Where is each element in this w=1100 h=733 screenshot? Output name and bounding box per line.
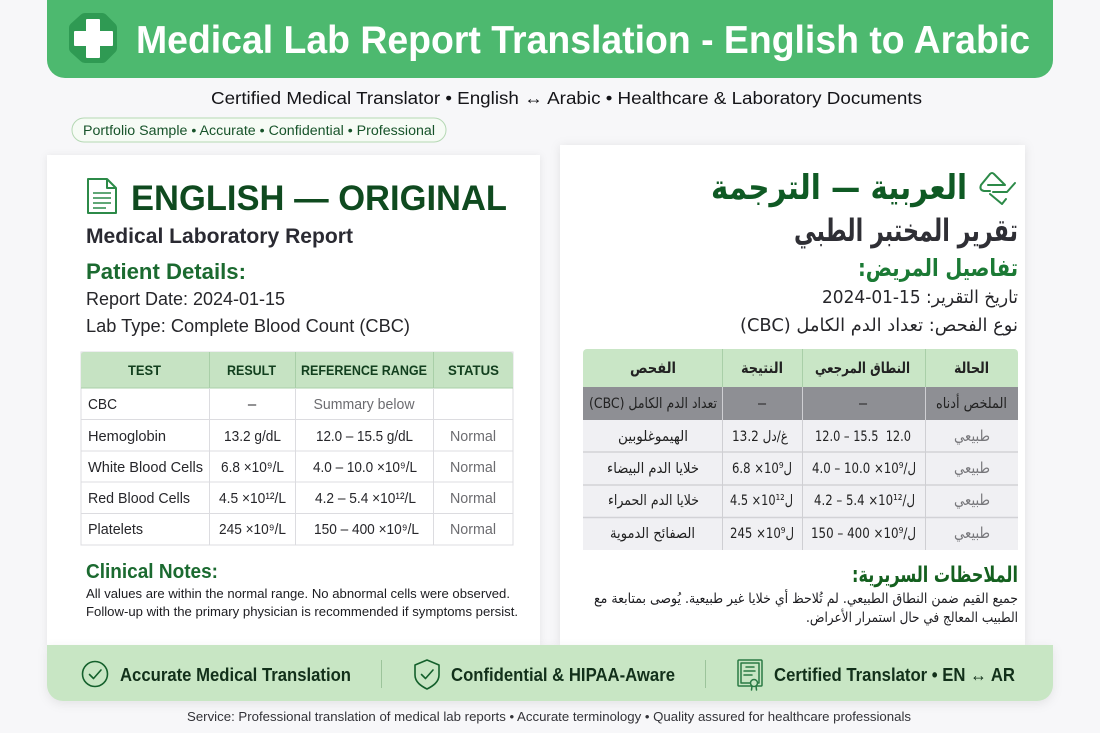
Arabic row: platelets: الصفائح الدموية: [610, 526, 695, 542]
row: white blood cells: 6.8 ×10⁹/L: [221, 459, 284, 476]
row: hemoglobin: 12.0 – 15.5 g/dL: [316, 428, 413, 445]
table header: TEST: [128, 362, 161, 378]
table: English results: [81, 352, 513, 545]
heading: Arabic clinical notes: الملاحظات السريرية:: [852, 563, 1018, 588]
Arabic row: red blood cells: [608, 491, 990, 510]
icon: shield: [415, 660, 439, 689]
Arabic row: white blood cells: 4.0 – 10.0 ×10⁹/ل: [812, 461, 916, 477]
Arabic patient detail lines: تاريخ التقرير: ⁦2024-01-15⁩: [822, 287, 1018, 308]
table header: REFERENCE RANGE: [301, 362, 427, 378]
feature: confidential: Confidential & HIPAA-Aware: [451, 665, 675, 685]
heading: patient details: Patient Details:: [86, 259, 246, 284]
row: red blood cells: [88, 490, 496, 507]
row: platelets: [88, 521, 496, 538]
Arabic row: red blood cells: 4.2 – 5.4 ×10¹²/ل: [814, 493, 915, 509]
Arabic report title: تقرير المختبر الطبي: [794, 213, 1018, 249]
row: red blood cells: 4.5 ×10¹²/L: [219, 490, 286, 507]
Arabic row: white blood cells: خلايا الدم البيضاء: [607, 461, 699, 477]
heading: Arabic patient details: تفاصيل المريض:: [858, 254, 1018, 282]
bottom feature band: [47, 645, 1053, 701]
row: hemoglobin: Hemoglobin: [88, 428, 166, 445]
icon: translation swoosh: [980, 173, 1015, 204]
row: CBC: –: [248, 396, 257, 413]
Arabic row: platelets: 245 ×10⁹ل: [730, 526, 794, 542]
table: Arabic results: [583, 349, 1018, 550]
row: white blood cells: 4.0 – 10.0 ×10⁹/L: [313, 459, 417, 476]
Arabic row: platelets: [610, 524, 990, 543]
row: CBC: CBC: [88, 396, 117, 413]
icon: medical cross: [75, 19, 112, 57]
row: white blood cells: White Blood Cells: [88, 459, 203, 476]
row: hemoglobin: [88, 428, 496, 445]
icon: check circle: [82, 662, 108, 686]
Arabic row: red blood cells: خلايا الدم الحمراء: [608, 493, 699, 509]
tag pill: Portfolio Sample • Accurate • Confidential • Professional: [83, 123, 435, 138]
row: hemoglobin: Normal: [450, 428, 496, 445]
clinical notes text: All values are within the normal range. No abnormal cells were observed.: [86, 587, 510, 601]
Arabic clinical notes text: الطبيب المعالج في حال استمرار الأعراض.: [806, 608, 1018, 626]
row: hemoglobin: 13.2 g/dL: [224, 428, 281, 445]
Arabic row: platelets: 150 – 400 ×10⁹/ل: [811, 526, 916, 542]
Arabic row: hemoglobin: 12.0 – 15.5 12.0: [815, 429, 911, 445]
patient detail lines: [86, 289, 410, 336]
Arabic row: CBC summary: تعداد الدم الكامل (CBC): [589, 396, 717, 412]
Arabic row: CBC summary: –: [758, 396, 767, 412]
Arabic table header: النتيجة: [741, 359, 783, 377]
Arabic table header: [630, 359, 989, 377]
Arabic table header: النطاق المرجعي: [815, 359, 910, 377]
icon: certificate: [738, 660, 762, 690]
Arabic patient detail lines: نوع الفحص: تعداد الدم الكامل (CBC): [740, 315, 1018, 336]
clinical notes text: Follow-up with the primary physician is recommended if symptoms persist.: [86, 605, 518, 619]
row: platelets: 150 – 400 ×10⁹/L: [314, 521, 419, 538]
patient detail lines: Lab Type: Complete Blood Count (CBC): [86, 316, 410, 336]
icon: document: [88, 179, 116, 213]
header banner: [47, 0, 1053, 78]
clinical notes text: [86, 587, 518, 619]
subtitle: Certified Medical Translator • English ↔ Arabic • Healthcare & Laboratory Documents: [211, 88, 922, 108]
Arabic row: CBC summary: الملخص أدناه: [936, 393, 1007, 412]
row: platelets: Platelets: [88, 521, 143, 538]
row: white blood cells: [88, 459, 496, 476]
heading: clinical notes: Clinical Notes:: [86, 561, 218, 583]
tag pill: [72, 118, 446, 142]
Arabic row: red blood cells: 4.5 ×10¹²ل: [730, 493, 793, 509]
feature: accurate translation: Accurate Medical Translation: [120, 665, 351, 685]
row: red blood cells: Normal: [450, 490, 496, 507]
row: platelets: 245 ×10⁹/L: [219, 521, 286, 538]
footer service line: Service: Professional translation of medical lab reports • Accurate terminology • Quality assured for healthcare professionals: [187, 710, 911, 724]
Arabic row: CBC summary: –: [859, 396, 868, 412]
table header: [128, 362, 499, 378]
Arabic row: hemoglobin: طبيعي: [954, 427, 990, 446]
row: white blood cells: Normal: [450, 459, 496, 476]
Arabic patient detail lines: [740, 287, 1018, 336]
row: red blood cells: 4.2 – 5.4 ×10¹²/L: [315, 490, 416, 507]
row: red blood cells: Red Blood Cells: [88, 490, 190, 507]
panel: English original: [47, 155, 540, 645]
Arabic row: white blood cells: طبيعي: [954, 459, 990, 478]
Arabic row: white blood cells: 6.8 ×10⁹ل: [732, 461, 792, 477]
Arabic row: red blood cells: طبيعي: [954, 491, 990, 510]
report title: Medical Laboratory Report: [86, 225, 353, 248]
row: platelets: Normal: [450, 521, 496, 538]
table header: STATUS: [448, 362, 499, 378]
heading: Arabic translation: العربية — الترجمة: [711, 168, 967, 208]
Arabic clinical notes text: جميع القيم ضمن النطاق الطبيعي. لم تُلاحظ أي خلايا غير طبيعية. يُوصى بمتابعة مع: [594, 589, 1018, 607]
Arabic row: hemoglobin: [618, 427, 990, 446]
Arabic table header: الحالة: [954, 359, 989, 377]
panel: Arabic translation: [560, 145, 1025, 645]
row: CBC: [88, 396, 415, 413]
patient detail lines: Report Date: 2024-01-15: [86, 289, 285, 309]
Arabic row: hemoglobin: 13.2 غ/دل: [732, 429, 788, 445]
row: CBC: Summary below: [314, 396, 415, 413]
title: Medical Lab Report Translation - English to Arabic: [136, 19, 1030, 62]
table header: RESULT: [227, 362, 276, 378]
feature: certified translator: Certified Translator • EN ↔ AR: [774, 665, 1015, 685]
Arabic table header: الفحص: [630, 359, 676, 377]
Arabic row: CBC summary: [589, 393, 1007, 412]
heading: English original: ENGLISH — ORIGINAL: [131, 179, 507, 218]
Arabic row: hemoglobin: الهيموغلوبين: [618, 429, 688, 445]
Arabic row: white blood cells: [607, 459, 990, 478]
Arabic row: platelets: طبيعي: [954, 524, 990, 543]
Arabic clinical notes text: [594, 589, 1018, 626]
